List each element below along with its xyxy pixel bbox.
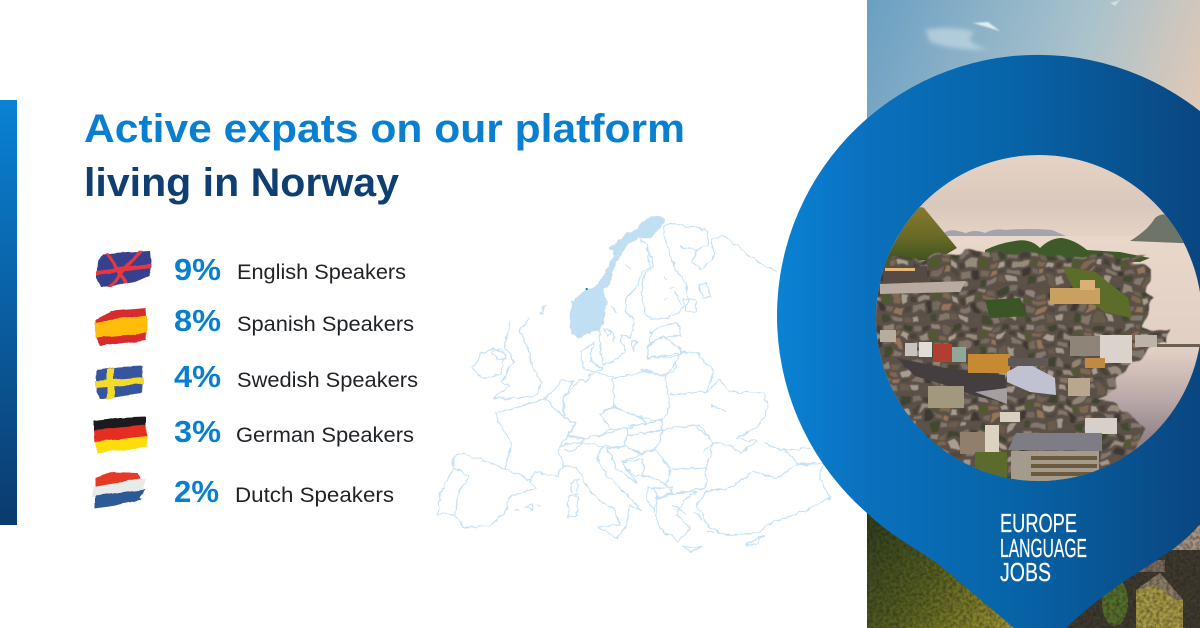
distant islands [940,229,1066,236]
inner harbour water [883,266,928,284]
row: English: English Speakers [237,261,406,284]
photo background: sky, forest and houses [867,0,1200,628]
town base [860,252,1168,495]
left accent bar [0,100,17,525]
row: Swedish [95,359,418,399]
icon: UK flag [96,250,151,287]
central hills [985,238,1150,262]
row: German: 3% [174,414,221,449]
row: Dutch: 2% [174,474,219,509]
circular photo of Alesund [860,150,1200,495]
Norway highlighted [569,215,665,338]
green slope [1062,266,1132,318]
row: Swedish: 4% [174,359,221,394]
title: living in Norway [84,161,400,205]
row: Spanish: Spanish Speakers [237,313,414,336]
colourful wharf houses [905,343,917,356]
row: Spanish [95,303,414,346]
logo: JOBS [1000,557,1051,587]
right mountain [1130,214,1184,244]
map pin [777,55,1200,628]
icon: Sweden flag [95,366,144,399]
row: Dutch: Dutch Speakers [235,484,394,507]
icon: Germany flag [94,417,147,453]
row: Spanish: 8% [174,303,221,338]
sky [891,155,1188,250]
title [84,107,685,205]
row: English [96,250,406,287]
speaker list [92,250,418,509]
town buildings [880,268,1157,478]
waterfront building [1008,433,1102,486]
sea [870,236,1200,486]
icon: Netherlands flag [92,472,146,508]
left mountain [884,207,957,266]
logo: LANGUAGE [1000,533,1087,563]
row: Dutch [92,472,394,509]
row: German: German Speakers [236,424,414,447]
clouds [925,28,990,50]
logo [1000,508,1087,587]
row: English: 9% [174,252,221,287]
map of Europe [438,215,830,552]
icon: Spain flag [95,308,147,346]
row: German [94,414,414,453]
row: Swedish: Swedish Speakers [237,369,418,392]
pier [1157,344,1200,347]
title: Active expats on our platform [84,107,685,151]
logo: EUROPE [1000,508,1077,538]
location marker [586,288,588,290]
